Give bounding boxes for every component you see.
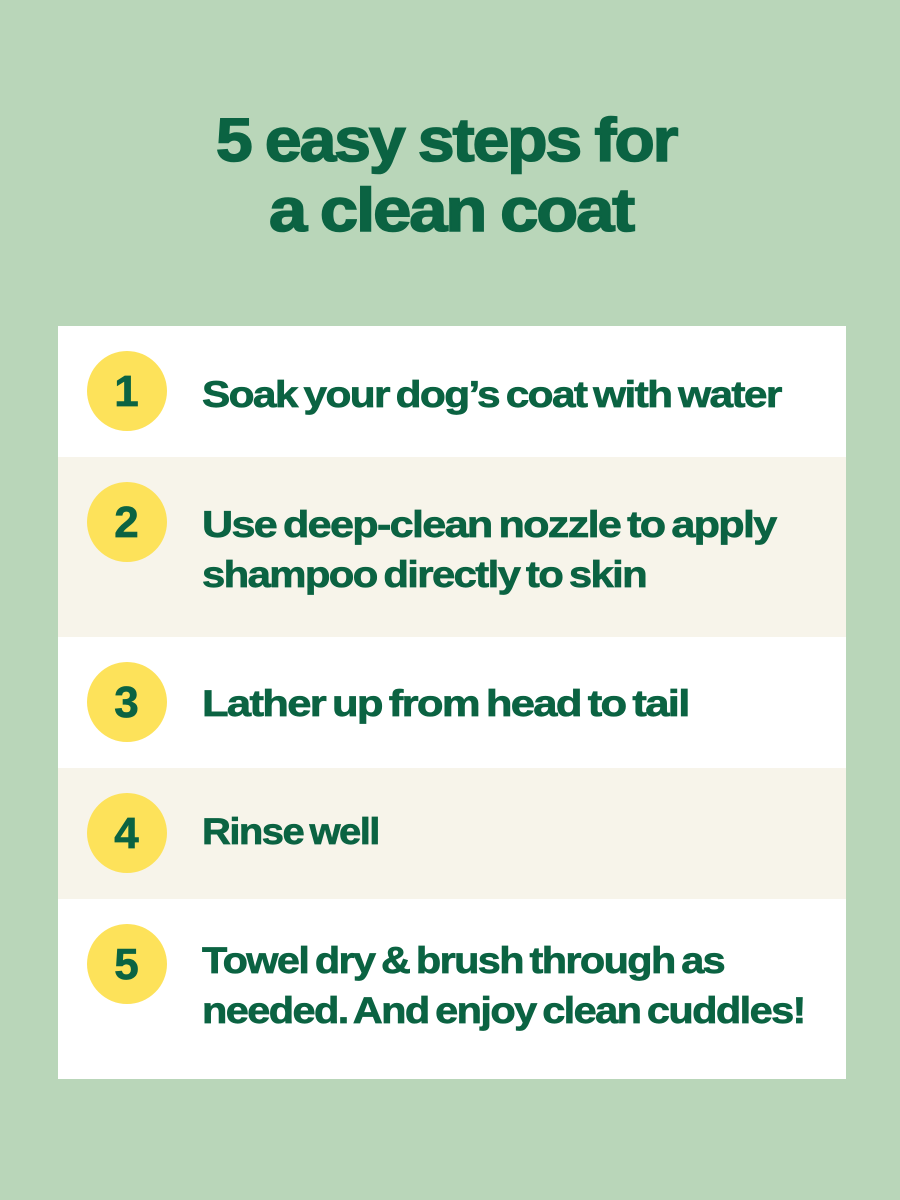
step 2: Use deep-clean nozzle to apply (202, 503, 776, 545)
step 1: 1 (114, 367, 139, 416)
step 5 (58, 899, 846, 1079)
step 3: Lather up from head to tail (202, 682, 689, 724)
step 5: Towel dry & brush through as (202, 939, 724, 981)
step 2: 2 (114, 498, 139, 547)
step 1: Soak your dog’s coat with water (202, 373, 781, 415)
step 3 (58, 637, 846, 768)
title: a clean coat (269, 176, 633, 244)
step 4: 4 (114, 809, 139, 858)
step 4: Rinse well (202, 810, 379, 852)
title: 5 easy steps for (216, 106, 676, 174)
step 4 (58, 768, 846, 899)
title (216, 106, 678, 244)
panel: steps list (58, 326, 846, 1079)
step 1 (58, 326, 846, 457)
step 3: 3 (114, 678, 139, 727)
step 5: needed. And enjoy clean cuddles! (202, 989, 805, 1031)
step 2 (58, 457, 846, 637)
step 2: shampoo directly to skin (202, 553, 646, 595)
step 5: 5 (114, 940, 139, 989)
